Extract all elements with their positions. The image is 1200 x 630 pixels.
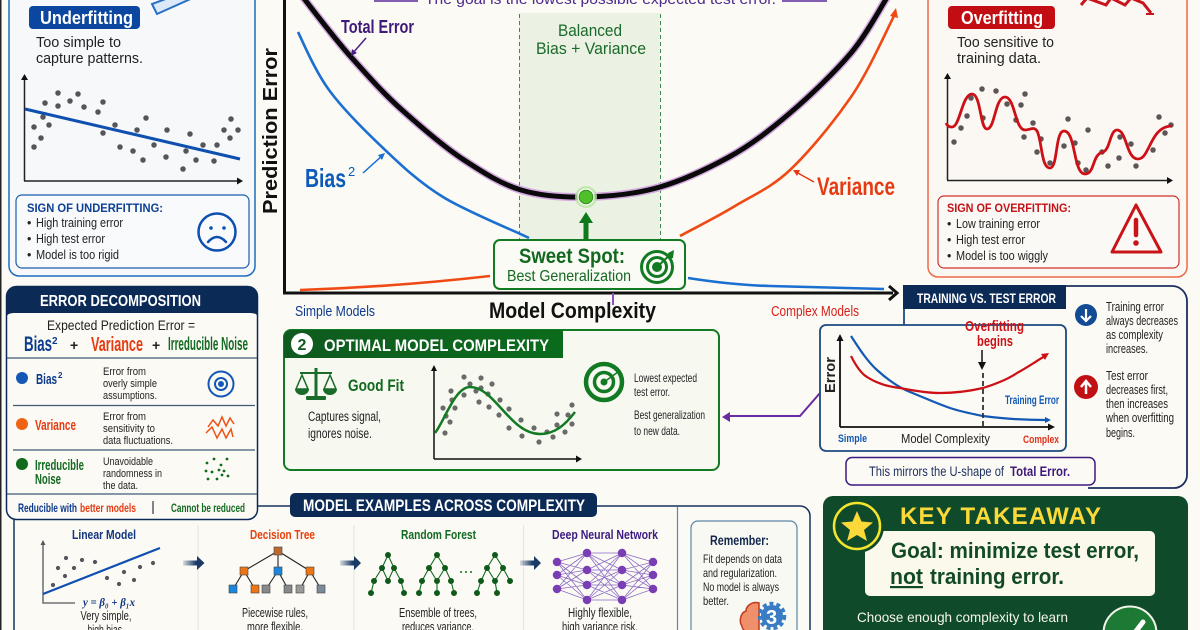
chart: training vs test: Simple: [838, 433, 867, 445]
callout: remember: No model is always: [703, 580, 779, 594]
formula: Variance: [91, 334, 143, 356]
icon: brain and gear: 3: [766, 607, 777, 629]
label: balanced: Balanced: [558, 21, 622, 40]
footer: reducibility: Cannot be reduced: [171, 501, 245, 515]
label: variance: [793, 170, 895, 201]
goal box: [865, 531, 1155, 596]
panel: key takeaway: [823, 496, 1188, 630]
formula: Bias: [24, 333, 52, 356]
icon: bias target: [208, 372, 234, 396]
callout: sign of underfitting: High training error: [36, 216, 123, 230]
callout: sign of overfitting: Model is too wiggly: [956, 249, 1049, 263]
callout: sign of underfitting: High test error: [36, 232, 105, 246]
badge: overfitting: Overfitting: [961, 8, 1043, 28]
row: bias: [16, 366, 234, 402]
note: training error: as complexity: [1106, 327, 1163, 342]
label: variance: Variance: [817, 173, 895, 201]
row: variance: data fluctuations.: [103, 435, 173, 447]
note: training error: Training error: [1106, 299, 1164, 314]
text: overfitting description: [957, 34, 1054, 67]
label: balanced: [536, 21, 646, 58]
row: bias: 2: [58, 371, 63, 380]
panel: optimal model complexity: [284, 330, 719, 470]
callout: sign of overfitting: [938, 196, 1179, 268]
labels: x axis: [295, 298, 859, 323]
text: benefits: [634, 371, 705, 438]
heading: [290, 493, 597, 517]
row: variance: Error from: [103, 411, 146, 423]
footer: reducibility: better models: [80, 501, 136, 515]
panel: overfitting: [928, 0, 1187, 277]
row: variance: sensitivity to: [103, 423, 155, 435]
text: captures signal: Captures signal,: [308, 409, 381, 424]
row: bias: assumptions.: [103, 390, 157, 402]
label: bias squared: 2: [348, 164, 355, 179]
icon: notebook: [152, 0, 195, 14]
curve: total error: [302, 0, 888, 197]
callout: sweet spot: Sweet Spot:: [519, 245, 625, 268]
callout: sign of underfitting: •: [27, 232, 31, 246]
chart: training vs test: begins: [977, 333, 1013, 350]
arrow: training panel to optimal panel: [722, 393, 820, 422]
callout: sign of underfitting: [16, 195, 249, 268]
label: balanced: Bias + Variance: [536, 39, 646, 58]
formula: [24, 317, 248, 356]
formula: 2: [52, 336, 58, 347]
callout: remember: Remember:: [710, 533, 769, 548]
example: linear model: y = β₀ + β₁x: [81, 595, 135, 609]
row: noise: Unavoidable: [103, 456, 153, 468]
formula: +: [70, 337, 78, 353]
formula: Irreducible Noise: [168, 334, 248, 354]
example: linear model: Very simple,: [80, 609, 132, 623]
curve: bias squared: [298, 32, 884, 289]
icon: sad face: [198, 214, 236, 250]
callout: remember: Fit depends on data: [703, 552, 782, 566]
text: benefits: test error.: [634, 385, 670, 399]
row: bias: Bias: [36, 371, 57, 388]
example: linear model: [40, 527, 160, 630]
example: random forest: Random Forest: [401, 527, 477, 542]
callout: sign of underfitting: Model is too rigid: [36, 248, 119, 262]
callout: sign of overfitting: •: [947, 249, 951, 263]
heading: MODEL EXAMPLES ACROSS COMPLEXITY: [303, 496, 586, 515]
text: overfitting description: training data.: [957, 50, 1041, 67]
example: random forest: [371, 527, 510, 630]
row: variance: [16, 411, 234, 447]
icon: zigzag: [206, 417, 234, 438]
goal box: training error.: [930, 564, 1064, 589]
formula: +: [152, 337, 160, 353]
row: noise: Noise: [35, 471, 61, 488]
callout: sign of overfitting: High test error: [956, 233, 1025, 247]
label: y axis: Prediction Error: [260, 48, 282, 214]
icon: target: [642, 250, 674, 282]
goal box: Goal: minimize test error,: [891, 538, 1139, 563]
formula: Expected Prediction Error =: [47, 317, 195, 333]
icon: scales: [295, 368, 337, 400]
chart: training vs test: Overfitting: [965, 318, 1024, 335]
text: captures signal: [308, 409, 381, 441]
chart: overfit scatter: [944, 73, 1173, 184]
icon: check: [1104, 606, 1156, 630]
icon: warning triangle: [1112, 205, 1161, 252]
arrow: to sweet spot: [579, 212, 593, 241]
arrow: tree to forest: [340, 556, 361, 570]
arrow: forest to network: [520, 556, 541, 570]
example: linear model: Linear Model: [72, 527, 136, 542]
callout: sweet spot: Best Generalization: [507, 268, 631, 285]
panel: underfitting: [9, 0, 255, 276]
example: deep neural network: Highly flexible,: [568, 606, 632, 620]
row: noise: randomness in: [103, 468, 162, 480]
labels: x axis: Model Complexity: [489, 298, 657, 323]
label: total error: Total Error: [341, 17, 414, 37]
example: decision tree: [229, 527, 325, 630]
row: variance: Variance: [35, 417, 76, 434]
panel: training vs test error: [820, 285, 1187, 488]
row: noise: Irreducible: [35, 457, 84, 474]
chart: good fit: [431, 365, 582, 462]
chart: training vs test: Complex: [1023, 434, 1060, 446]
example: deep neural network: Deep Neural Network: [552, 527, 659, 542]
callout: sign of overfitting: •: [947, 233, 951, 247]
row: bias: overly simple: [103, 378, 157, 390]
axes: [284, 0, 897, 305]
callout: sign of underfitting: •: [27, 248, 31, 262]
note: test error: Test error: [1106, 368, 1149, 383]
heading: KEY TAKEAWAY: [900, 503, 1101, 530]
row: bias: Error from: [103, 366, 146, 378]
panel: error decomposition: [6, 286, 258, 520]
chart: training vs test: Model Complexity: [901, 431, 990, 446]
header: [284, 330, 563, 358]
goal box: not: [890, 564, 924, 589]
footer: reducibility: [18, 501, 245, 515]
chart: training vs test: [822, 318, 1060, 446]
badge: underfitting: Underfitting: [40, 8, 133, 28]
callout: sign of underfitting: •: [27, 216, 31, 230]
panel: model examples: [14, 493, 810, 630]
text: advice: Choose enough complexity to learn: [857, 609, 1068, 625]
example: deep neural network: [552, 527, 659, 630]
note: test error: when overfitting: [1105, 410, 1174, 425]
text: benefits: Lowest expected: [634, 371, 697, 385]
labels: x axis: Complex Models: [771, 303, 859, 320]
icon: target: [586, 364, 622, 400]
callout: remember: [691, 521, 797, 630]
callout: remember: better.: [703, 594, 729, 608]
icon: star badge: [830, 499, 884, 553]
note: test error: decreases first,: [1106, 382, 1168, 397]
example: random forest: Ensemble of trees,: [399, 606, 477, 620]
label: bias squared: [305, 153, 385, 193]
text: benefits: Best generalization: [634, 408, 705, 422]
row: noise: [16, 456, 228, 492]
text: underfitting description: [36, 34, 143, 67]
example: decision tree: Piecewise rules,: [242, 606, 308, 620]
callout: mirrors U-shape: [846, 458, 1095, 485]
text: benefits: to new data.: [634, 424, 680, 438]
chart: training vs test: Error: [822, 357, 839, 393]
text: underfitting description: capture patterns.: [36, 50, 143, 67]
arrow: linear to tree: [183, 556, 204, 570]
note: test error: [1074, 368, 1174, 440]
chart: training vs test: Training Error: [1005, 393, 1059, 407]
callout: sweet spot: [494, 240, 685, 289]
header: 2: [298, 337, 307, 354]
note: test error: begins.: [1106, 425, 1135, 440]
callout: sign of overfitting: Low training error: [956, 217, 1040, 231]
labels: x axis: Simple Models: [295, 303, 375, 320]
callout: sign of underfitting: SIGN OF UNDERFITTING:: [27, 203, 163, 215]
note: training error: increases.: [1106, 341, 1148, 356]
callout: mirrors U-shape: This mirrors the U-shape of: [869, 464, 1004, 479]
text: underfitting description: Too simple to: [36, 34, 121, 51]
curve: variance: [300, 12, 896, 290]
example: decision tree: Decision Tree: [250, 527, 315, 542]
icon: noise dots: [206, 459, 228, 479]
callout: sign of overfitting: •: [947, 217, 951, 231]
note: training error: [1075, 299, 1178, 356]
callout: mirrors U-shape: Total Error.: [1010, 463, 1070, 479]
footer: reducibility: Reducible with: [18, 501, 77, 515]
callout: remember: and regularization.: [703, 566, 777, 580]
note: test error: then increases: [1106, 396, 1168, 411]
label: good fit: Good Fit: [348, 376, 404, 395]
sweet-spot band: [519, 13, 660, 240]
header: [903, 285, 1066, 309]
label: bias squared: Bias: [305, 163, 346, 193]
heading: ERROR DECOMPOSITION: [40, 293, 201, 310]
marker: sweet spot dot: [575, 186, 597, 208]
text: overfitting description: Too sensitive to: [957, 34, 1054, 51]
text: captures signal: ignores noise.: [308, 426, 372, 441]
icon: wiggly arrow: [1081, 0, 1154, 14]
header: OPTIMAL MODEL COMPLEXITY: [324, 336, 550, 355]
main chart: error vs complexity: [260, 0, 898, 323]
label: total error: [341, 17, 414, 56]
callout: sign of overfitting: SIGN OF OVERFITTING:: [947, 203, 1071, 215]
chart: underfit scatter: [21, 74, 243, 184]
header: TRAINING VS. TEST ERROR: [917, 291, 1056, 306]
row: noise: the data.: [103, 480, 138, 492]
